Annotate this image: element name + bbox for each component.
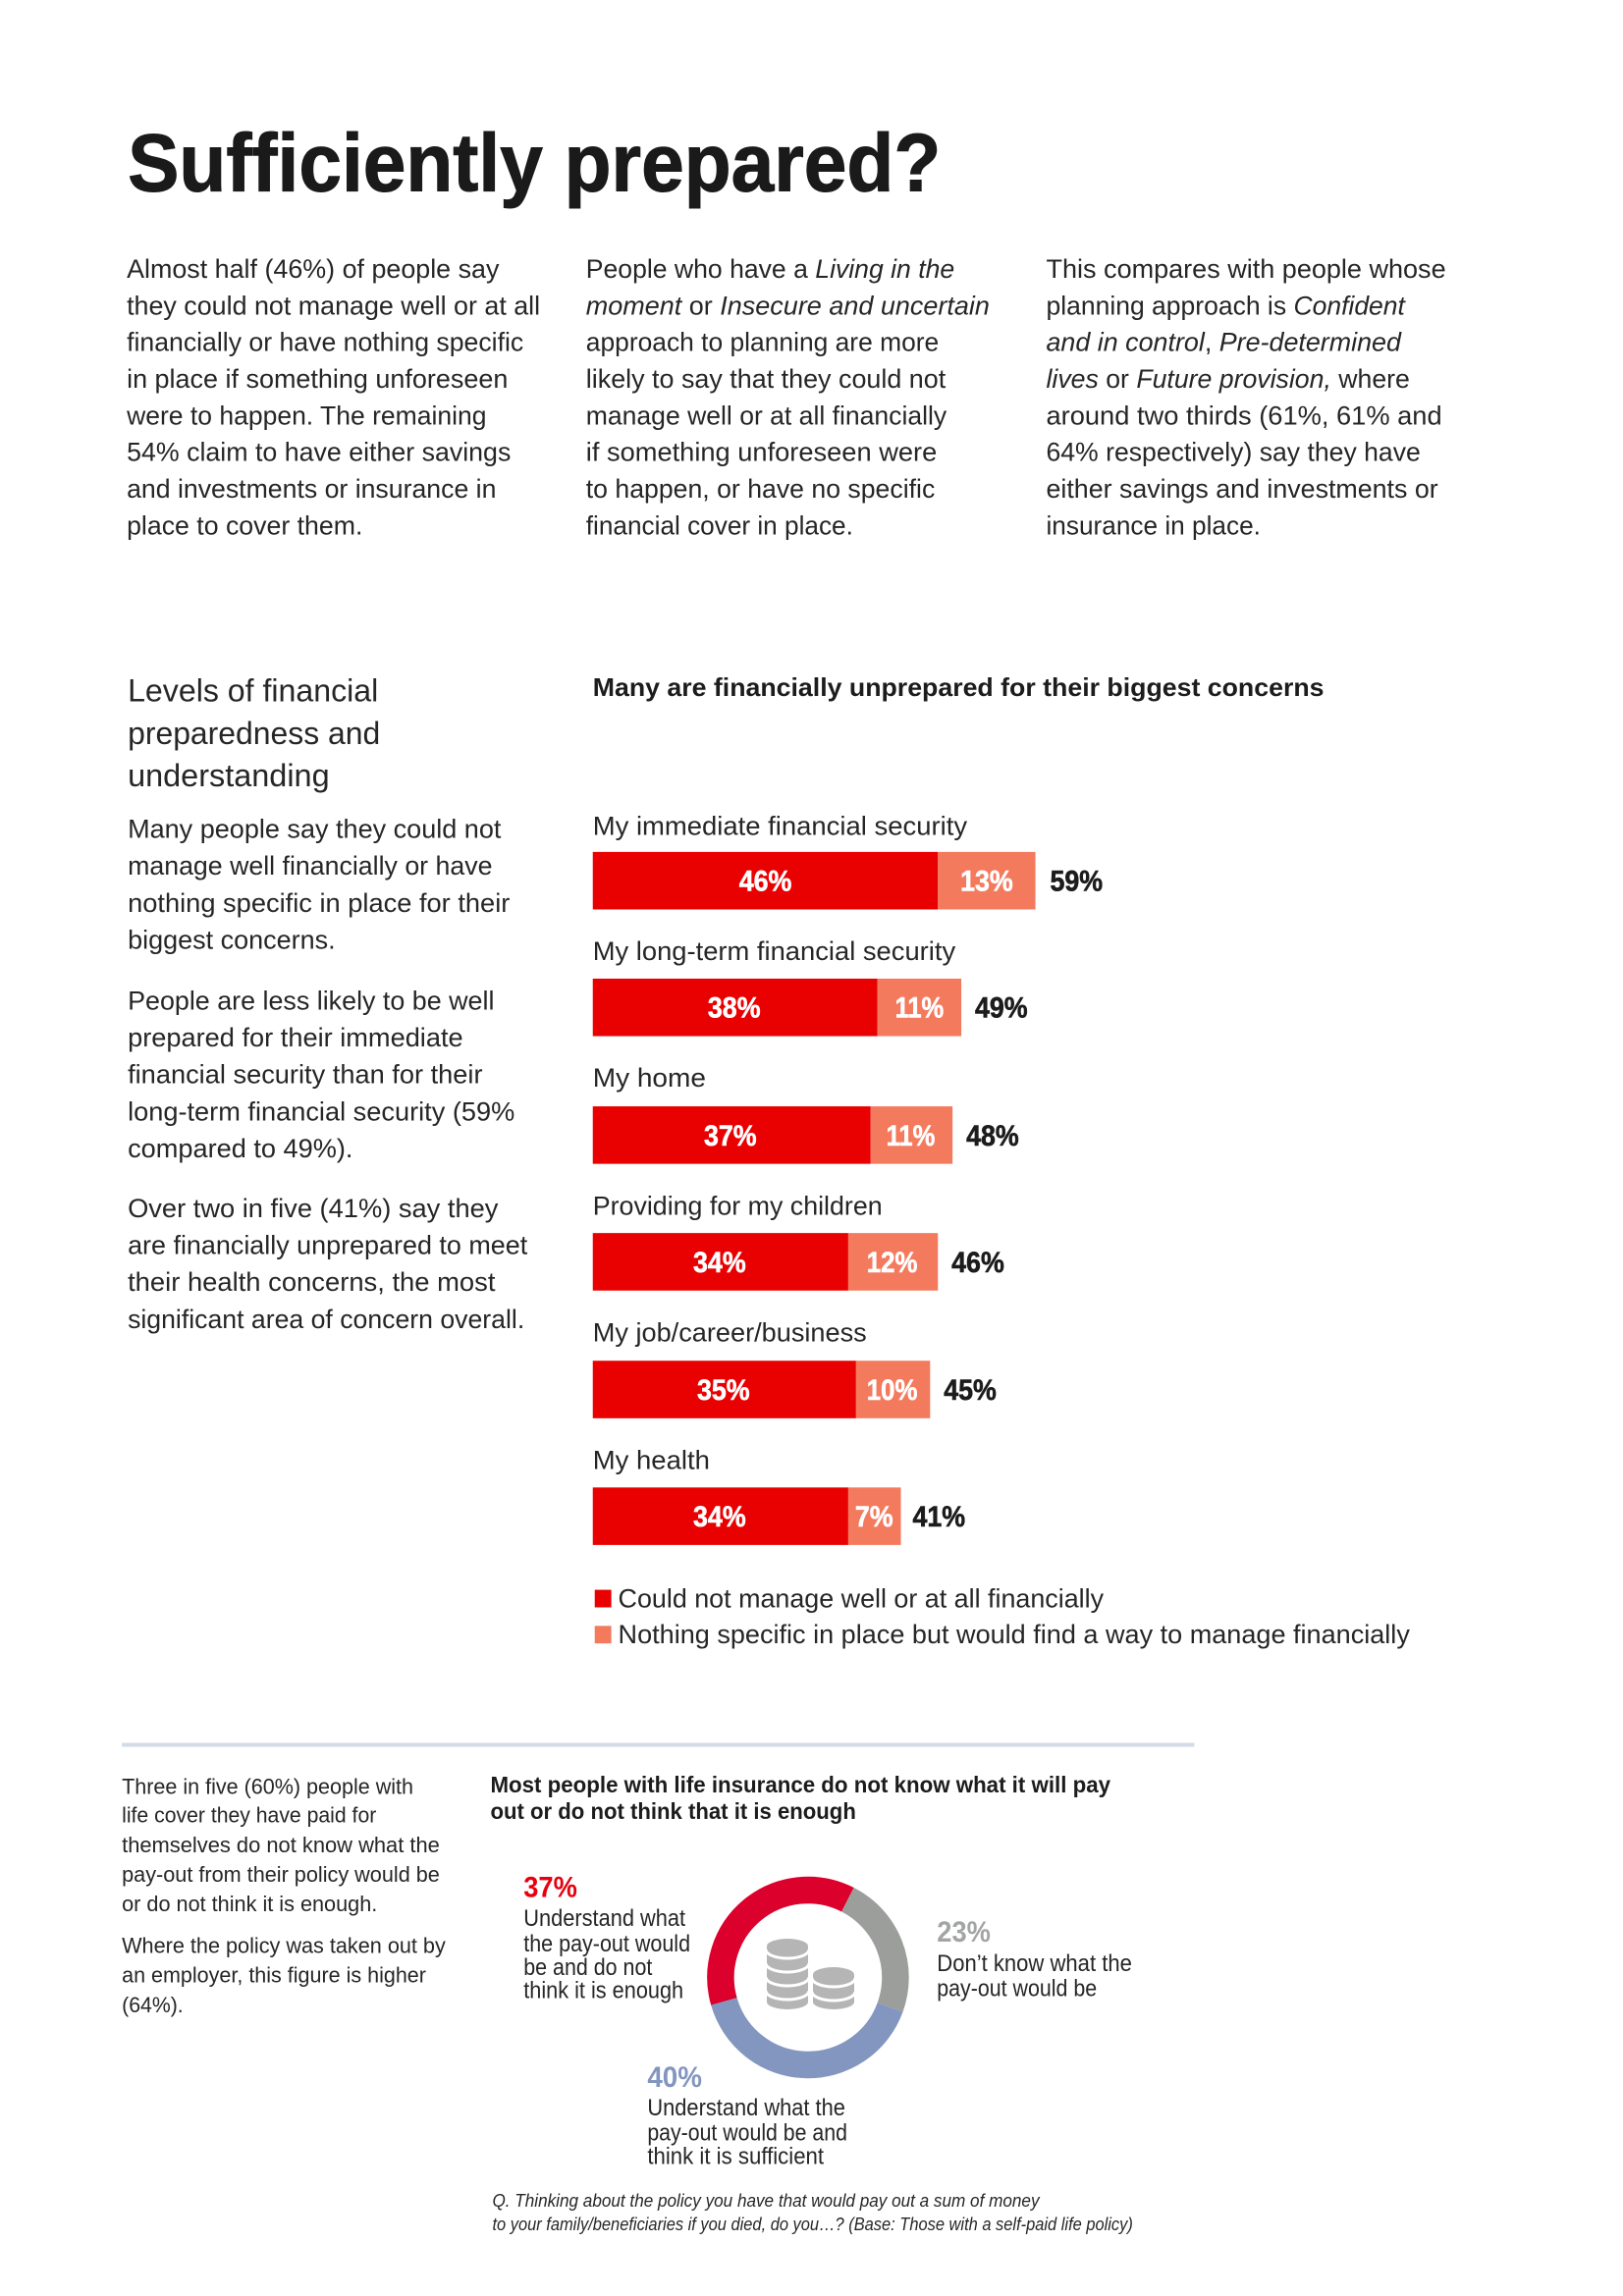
chart heading: Many are financially unprepared for their biggest concerns <box>593 672 1324 702</box>
section body text <box>128 814 528 1334</box>
intro text column 1: 54% claim to have either savings <box>127 438 511 467</box>
section body text: People are less likely to be well <box>128 986 494 1015</box>
donut segment: 37 percent <box>721 1890 847 2002</box>
bar row: long-term financial security: My long-term financial security <box>593 936 956 966</box>
section heading: levels of financial preparedness: Levels of financial <box>128 671 378 708</box>
bar row: immediate financial security <box>593 812 1103 909</box>
donut label: 40 percent: 40% <box>647 2061 702 2094</box>
intro text column 3: This compares with people whose <box>1046 254 1446 284</box>
bar row: my home <box>593 1063 1019 1164</box>
intro text column 2: if something unforeseen were <box>586 438 937 467</box>
donut label: 23 percent: 23% <box>937 1916 991 1949</box>
section body text: prepared for their immediate <box>128 1023 463 1052</box>
donut label: 37 percent: Understand what <box>523 1905 685 1932</box>
section body text: financial security than for their <box>128 1060 483 1090</box>
intro text column 2: manage well or at all financially <box>586 400 947 430</box>
intro text column 3 <box>1046 254 1446 540</box>
section body text: nothing specific in place for their <box>128 888 510 918</box>
life cover text: (64%). <box>122 1993 184 2017</box>
donut label: 37 percent: the pay-out would <box>523 1931 690 1957</box>
intro text column 2: to happen, or have no specific <box>586 474 935 504</box>
bar row: providing for my children: Providing for my children <box>593 1191 883 1220</box>
intro text column 3: and in control, Pre-determined <box>1046 328 1402 357</box>
section body text: are financially unprepared to meet <box>128 1230 528 1259</box>
bar row: my health: 7% <box>855 1501 893 1533</box>
section heading: levels of financial preparedness <box>128 671 380 793</box>
bar row: long-term financial security <box>593 936 1028 1037</box>
intro text column 1: place to cover them. <box>127 510 362 540</box>
life cover text: Three in five (60%) people with <box>122 1775 413 1799</box>
bar row: immediate financial security: 13% <box>960 866 1013 898</box>
intro text column 1: in place if something unforeseen <box>127 364 508 394</box>
section body text: Over two in five (41%) say they <box>128 1194 499 1223</box>
bar row: my health <box>593 1445 965 1545</box>
donut label: 37 percent: think it is enough <box>523 1978 683 2004</box>
donut label: 37 percent: be and do not <box>523 1954 653 1981</box>
life cover text: an employer, this figure is higher <box>122 1962 426 1987</box>
bar row: immediate financial security: My immediate financial security <box>593 812 968 841</box>
chart legend: Nothing specific in place but would find a way to manage financially <box>619 1620 1410 1649</box>
bar row: my health: 41% <box>912 1501 965 1533</box>
section heading: levels of financial preparedness: understanding <box>128 757 330 793</box>
bar chart: biggest concerns <box>593 812 1103 1545</box>
chart legend <box>595 1583 1410 1649</box>
footnote <box>492 2190 1133 2234</box>
intro text column 2: financial cover in place. <box>586 510 853 540</box>
donut label: 40 percent: Understand what the <box>647 2095 845 2121</box>
donut segment: 40 percent <box>724 2002 891 2064</box>
donut label: 40 percent: pay-out would be and <box>647 2120 847 2147</box>
life cover text: life cover they have paid for <box>122 1802 377 1827</box>
bar row: my home: 11% <box>887 1120 935 1152</box>
intro text column 2 <box>586 254 990 540</box>
intro text column 3: either savings and investments or <box>1046 474 1438 504</box>
section body text: their health concerns, the most <box>128 1267 496 1297</box>
section body text: biggest concerns. <box>128 926 336 955</box>
bar row: providing for my children: 46% <box>951 1247 1004 1279</box>
bar row: providing for my children: 34% <box>693 1247 746 1279</box>
donut label: 37 percent: 37% <box>523 1871 577 1903</box>
life cover text: pay-out from their policy would be <box>122 1862 440 1887</box>
footnote: to your family/beneficiaries if you died, do you…? (Base: Those with a self-paid life policy) <box>492 2214 1133 2234</box>
intro text column 3: 64% respectively) say they have <box>1046 438 1421 467</box>
bar row: job, career, business: 35% <box>697 1374 750 1407</box>
section body text: Many people say they could not <box>128 814 502 843</box>
intro text column 1: they could not manage well or at all <box>127 291 540 320</box>
bar row: providing for my children <box>593 1191 1004 1291</box>
intro text column 3: planning approach is Confident <box>1046 291 1406 320</box>
life cover text: Where the policy was taken out by <box>122 1933 447 1957</box>
donut label: 23 percent: Don’t know what the <box>937 1950 1132 1977</box>
section heading: levels of financial preparedness: preparedness and <box>128 715 380 751</box>
bar row: long-term financial security: 11% <box>895 992 944 1025</box>
bar row: my home: 48% <box>966 1120 1019 1152</box>
bar row: long-term financial security: 49% <box>975 992 1028 1025</box>
intro text column 1: Almost half (46%) of people say <box>127 254 500 284</box>
intro text column 3: lives or Future provision, where <box>1046 364 1410 394</box>
chart legend: Could not manage well or at all financially <box>619 1583 1105 1613</box>
bar row: my home: 37% <box>704 1120 757 1152</box>
intro text column 3: around two thirds (61%, 61% and <box>1046 400 1442 430</box>
footnote: Q. Thinking about the policy you have that would pay out a sum of money <box>492 2190 1041 2211</box>
donut label: 23 percent: pay-out would be <box>937 1976 1097 2002</box>
bar row: immediate financial security: 46% <box>739 866 791 898</box>
icon: coin stacks <box>766 1939 855 2009</box>
bar row: my home: My home <box>593 1063 706 1093</box>
bar row: job, career, business: 45% <box>944 1374 997 1407</box>
life cover text <box>122 1775 447 2017</box>
bar row: job, career, business: 10% <box>867 1374 917 1407</box>
intro text column 3: insurance in place. <box>1046 510 1261 540</box>
intro text column 2: moment or Insecure and uncertain <box>586 291 990 320</box>
donut label: 40 percent <box>647 2061 847 2169</box>
donut chart heading: Most people with life insurance do not know what it will pay <box>490 1772 1110 1797</box>
bar row: immediate financial security: 59% <box>1050 866 1103 898</box>
section body text: significant area of concern overall. <box>128 1305 524 1334</box>
bar row: my health: 34% <box>693 1501 746 1533</box>
donut chart: life insurance pay-out understanding <box>721 1890 895 2064</box>
donut label: 23 percent <box>937 1916 1132 2002</box>
section body text: long-term financial security (59% <box>128 1096 514 1126</box>
intro text column 1 <box>126 254 540 540</box>
donut chart heading: out or do not think that it is enough <box>490 1798 856 1824</box>
intro text column 1: and investments or insurance in <box>127 474 496 504</box>
bar row: long-term financial security: 38% <box>708 992 761 1025</box>
bar row: job, career, business <box>593 1317 997 1418</box>
donut label: 40 percent: think it is sufficient <box>647 2143 824 2169</box>
section body text: manage well financially or have <box>128 851 492 881</box>
intro text column 2: likely to say that they could not <box>586 364 947 394</box>
life cover text: themselves do not know what the <box>122 1833 440 1857</box>
title: Sufficiently prepared? <box>128 117 941 209</box>
bar row: job, career, business: My job/career/business <box>593 1317 867 1347</box>
life cover text: or do not think it is enough. <box>122 1892 377 1916</box>
bar row: providing for my children: 12% <box>867 1247 917 1279</box>
donut chart heading <box>490 1772 1110 1824</box>
intro text column 2: approach to planning are more <box>586 328 939 357</box>
bar row: my health: My health <box>593 1445 710 1474</box>
intro text column 1: financially or have nothing specific <box>127 328 523 357</box>
intro text column 1: were to happen. The remaining <box>126 400 487 430</box>
section body text: compared to 49%). <box>128 1134 352 1163</box>
intro text column 2: People who have a Living in the <box>586 254 954 284</box>
donut label: 37 percent <box>523 1871 690 2004</box>
donut segment: 23 percent <box>847 1899 895 2007</box>
